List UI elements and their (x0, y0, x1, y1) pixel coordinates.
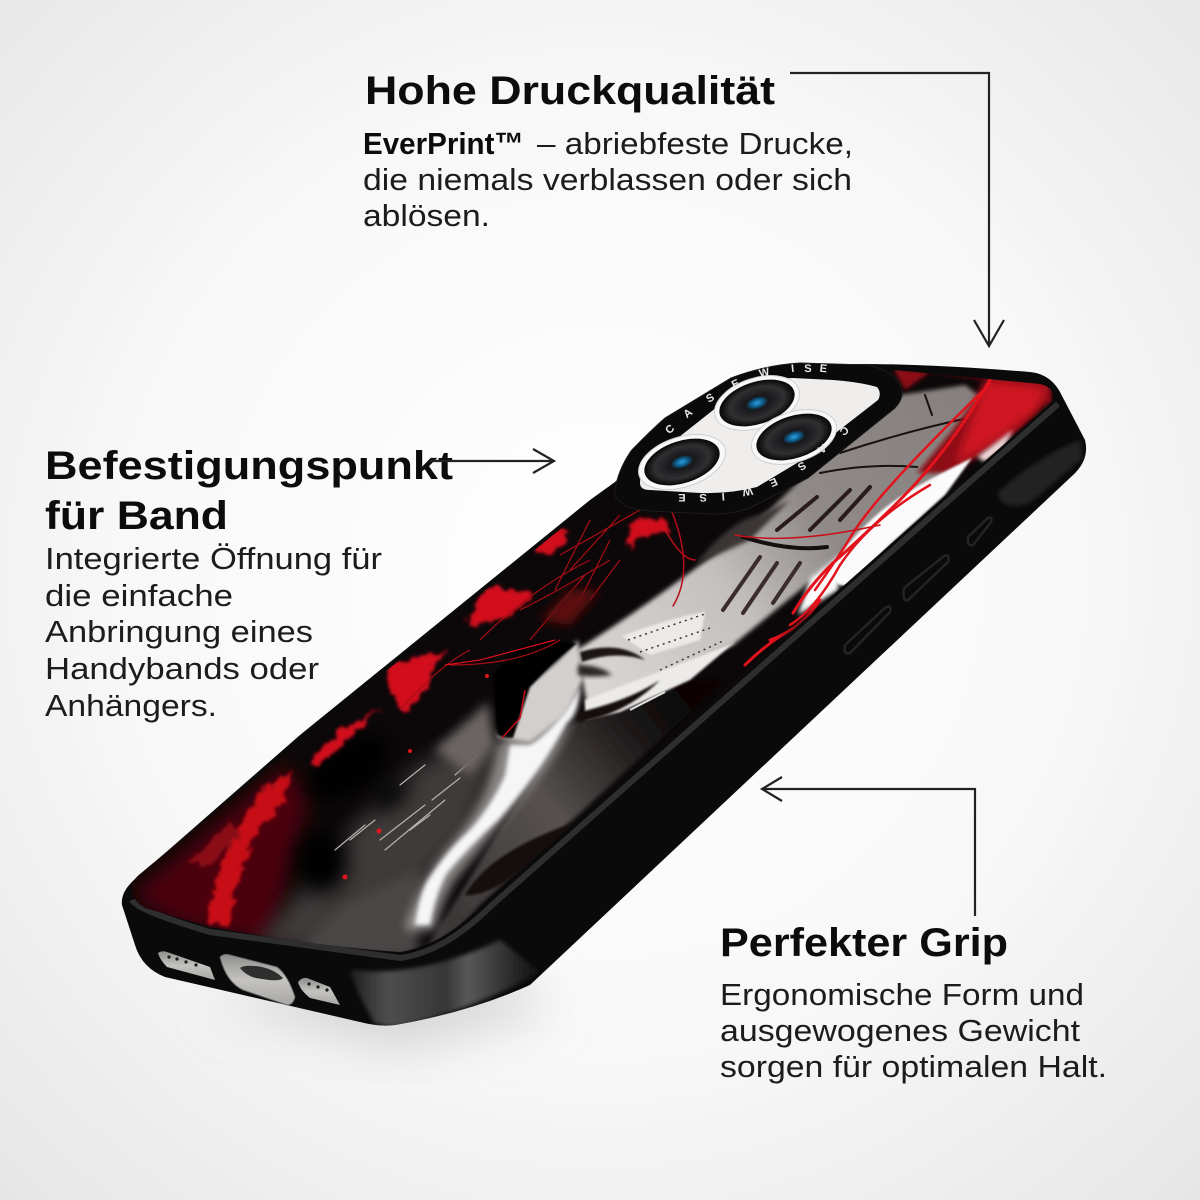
bump frame (615, 363, 902, 514)
description: sorgen für optimalen Halt. (720, 1049, 1107, 1084)
description: Integrierte Öffnung für (45, 541, 382, 576)
phone case (120, 360, 1086, 1027)
side buttons (845, 518, 992, 653)
arrow: to print surface (790, 73, 1004, 346)
heading: für Band (45, 494, 228, 538)
CASEWISE engraving: E (767, 475, 779, 489)
CASEWISE engraving: E (730, 377, 742, 391)
CASEWISE engraving: I (721, 490, 725, 502)
rear printed artwork (120, 360, 1070, 960)
CASEWISE engraving: E (678, 491, 686, 503)
upper gray face (577, 385, 985, 705)
description: die einfache (45, 578, 233, 613)
black blobs in smoke (295, 721, 415, 894)
description: Handybands oder (45, 651, 319, 686)
gray wisps (334, 754, 478, 851)
CASEWISE engraving: C (837, 423, 851, 438)
case body (122, 364, 1086, 1026)
CASEWISE engraving: S (804, 363, 812, 375)
CASEWISE engraving: W (758, 366, 771, 380)
CASEWISE engraving (663, 363, 851, 503)
facial scars and eye (723, 395, 973, 613)
description (45, 541, 382, 723)
CASEWISE engraving: C (663, 423, 677, 437)
CASEWISE engraving: I (791, 363, 795, 375)
bright red lower left streaks (190, 770, 293, 925)
heading: Befestigungspunkt (45, 444, 453, 488)
camera plate (640, 378, 880, 493)
description: ablösen. (363, 198, 490, 233)
case details on side and bottom (132, 404, 1083, 1027)
CASEWISE engraving: W (741, 484, 754, 498)
text block: Perfekter Grip (720, 921, 1107, 1084)
CASEWISE engraving: A (815, 441, 829, 456)
arrow: to attachment point (430, 449, 554, 473)
heading (45, 444, 453, 538)
description: ausgewogenes Gewicht (720, 1013, 1080, 1048)
dark hollow in hand (493, 640, 577, 738)
description: Anbringung eines (45, 614, 313, 649)
red hair (893, 368, 1052, 473)
CASEWISE engraving: E (819, 363, 828, 375)
CASEWISE engraving: A (681, 406, 695, 421)
dark art margin along the right edge (765, 401, 1052, 649)
heading: Perfekter Grip (720, 921, 1008, 965)
CASEWISE engraving: S (699, 491, 707, 503)
description: Ergonomische Form und (720, 977, 1084, 1012)
white band glow (405, 680, 580, 930)
description: EverPrint™ (363, 126, 524, 161)
dark red lower left area (130, 765, 310, 945)
dark swoops (464, 823, 572, 896)
red veins (400, 510, 640, 710)
CASEWISE engraving: S (795, 459, 808, 473)
CASEWISE engraving: S (704, 391, 717, 405)
gray smoke (255, 735, 500, 960)
hand (497, 640, 583, 742)
description (720, 977, 1107, 1084)
heading: Hohe Druckqualität (365, 69, 775, 113)
lenses (631, 366, 844, 500)
text block: Hohe Druckqualität (363, 69, 853, 233)
lower gray area right of the white band (425, 680, 725, 950)
red splashes (307, 517, 670, 765)
description: Anhängers. (45, 688, 217, 723)
description: die niemals verblassen oder sich (363, 162, 852, 197)
description: – abriebfeste Drucke, (537, 126, 853, 161)
red sparks (342, 674, 489, 880)
arrow: to case side (762, 777, 975, 916)
description (363, 126, 853, 233)
red hair strands (660, 380, 990, 665)
text block: Befestigungspunkt für Band (45, 444, 453, 723)
white band (415, 687, 580, 925)
charging port and speakers (158, 951, 340, 1005)
lips and textured skin (578, 612, 735, 722)
phone drop shadow (210, 980, 550, 1050)
bright white highlights beside hair (798, 430, 1013, 615)
camera bump (615, 363, 902, 514)
